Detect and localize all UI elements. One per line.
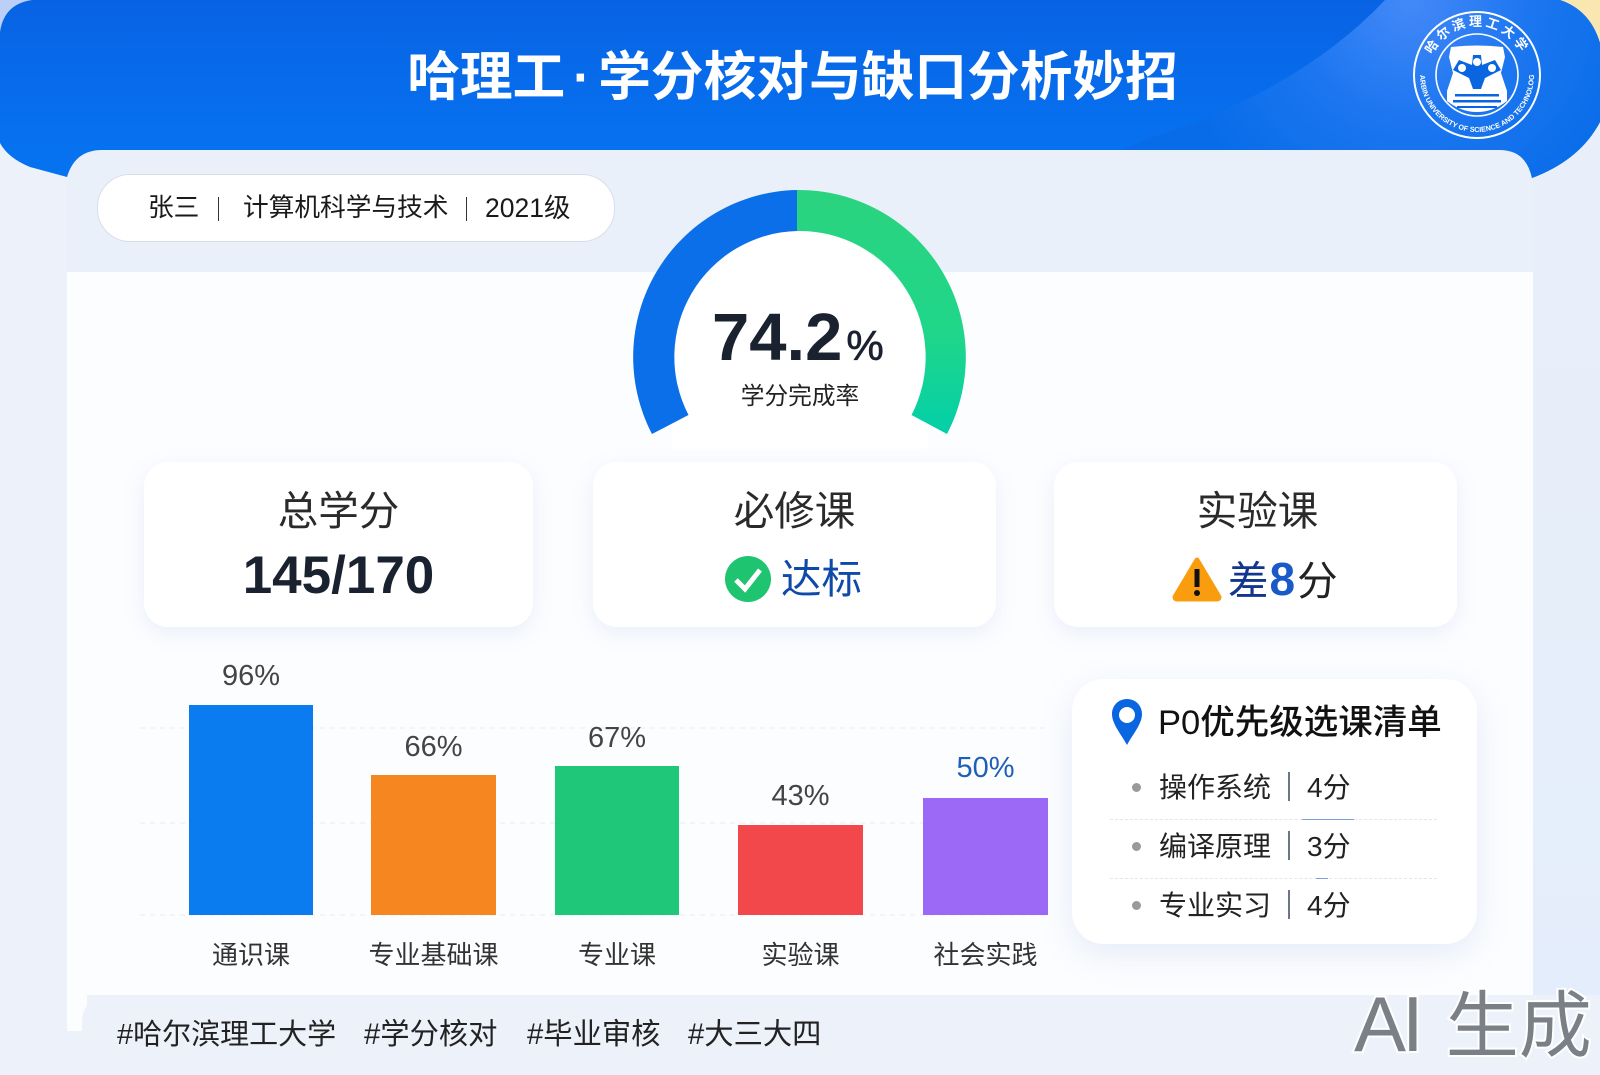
- bar: general: 96%: [222, 660, 280, 692]
- bar: major: 专业课: [578, 940, 656, 970]
- bar: social practice: 社会实践: [933, 940, 1038, 970]
- bar: general: 通识课: [212, 940, 290, 970]
- page background strips: [1533, 0, 1600, 1067]
- card label: 总学分: [278, 488, 399, 534]
- bar: foundation: 专业基础课: [368, 940, 499, 970]
- tag: #毕业审核: [527, 1018, 660, 1051]
- status text: 达标: [781, 556, 862, 602]
- grade: 2021级: [485, 193, 570, 223]
- tag: #大三大四: [688, 1018, 821, 1051]
- list item: internship: 4分: [1307, 890, 1351, 921]
- list item: operating systems: 操作系统: [1159, 772, 1271, 803]
- panel: priority list: [1072, 679, 1477, 944]
- bar: lab: 43%: [771, 780, 830, 812]
- card value: 145/170: [243, 546, 434, 605]
- tag: #学分核对: [364, 1018, 497, 1051]
- list item: operating systems: [1132, 772, 1351, 803]
- panel: main white area: [67, 272, 1533, 995]
- bar: general: [189, 660, 313, 970]
- gauge: credit completion: [633, 190, 966, 434]
- list item: operating systems: 4分: [1307, 772, 1351, 803]
- footer tags bar: [82, 995, 1600, 1067]
- bar: foundation: [368, 731, 499, 970]
- list item: internship: [1132, 890, 1351, 921]
- bar: major: [555, 722, 679, 970]
- bar: social practice: [923, 752, 1048, 970]
- bar: lab: 实验课: [761, 940, 840, 970]
- gauge value: 74.2%: [712, 300, 884, 375]
- list item: compilers: [1132, 831, 1351, 862]
- card label: 必修课: [734, 488, 855, 534]
- header banner: [0, 0, 1600, 178]
- list item: internship: 专业实习: [1159, 890, 1271, 921]
- top left corner tint: [0, 0, 40, 40]
- watermark: AI 生成: [1354, 980, 1592, 1068]
- title: 哈理工 学分核对与缺口分析妙招: [407, 48, 1178, 107]
- panel: white left edge of footer: [67, 995, 87, 1031]
- bar: lab: [738, 780, 863, 970]
- bar: foundation: 66%: [404, 731, 463, 763]
- status text: 差8分: [1228, 553, 1338, 605]
- list heading: P0优先级选课清单: [1158, 704, 1442, 742]
- bar chart: [140, 660, 1048, 970]
- card: total credits: [144, 462, 533, 627]
- top right corner tint: [1550, 0, 1600, 50]
- gauge label: 学分完成率: [741, 384, 859, 410]
- icon: university seal: [1413, 11, 1541, 139]
- card: lab courses: [1054, 462, 1457, 627]
- list item: compilers: 3分: [1307, 831, 1351, 862]
- panel: upper band: [67, 150, 1533, 272]
- list item: compilers: 编译原理: [1159, 831, 1271, 862]
- icon: warning: [1172, 558, 1222, 602]
- icon: map pin: [1112, 699, 1142, 745]
- bar: social practice: 50%: [956, 752, 1015, 784]
- tag: #哈尔滨理工大学: [117, 1019, 336, 1051]
- icon: check: [725, 556, 771, 602]
- icon: university seal: 哈尔滨理工大学: [1424, 15, 1528, 54]
- icon: university seal: HARBIN UNIVERSITY OF SCIENCE AND TECHNOLOGY: [1420, 74, 1534, 132]
- card label: 实验课: [1197, 488, 1318, 534]
- bar: major: 67%: [588, 722, 646, 754]
- card: required courses: [593, 462, 996, 627]
- name: 张三: [148, 194, 199, 222]
- title: ·: [573, 48, 591, 107]
- major: 计算机科学与技术: [243, 194, 448, 222]
- student info pill: [97, 174, 615, 242]
